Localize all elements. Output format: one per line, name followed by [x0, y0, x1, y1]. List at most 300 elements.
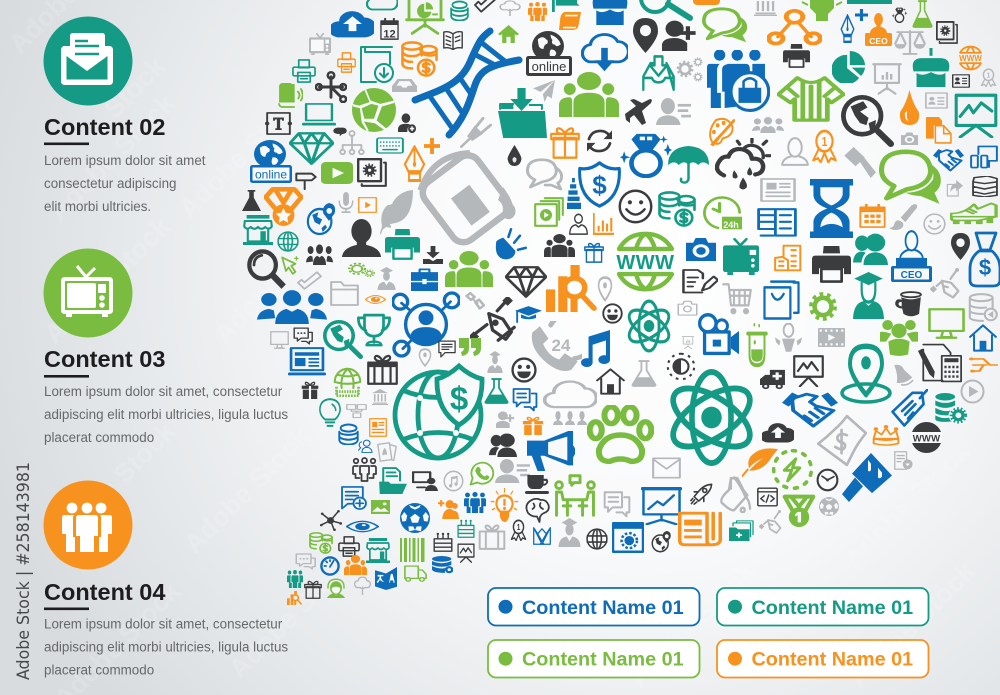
icon: quotes — [459, 338, 481, 356]
icon: gauge — [321, 557, 339, 575]
icon: gift outline — [305, 581, 321, 598]
icon: camera outline — [678, 301, 697, 315]
icon: diamond teal — [290, 133, 333, 164]
icon: mug — [895, 292, 921, 316]
icon: support agent — [327, 579, 345, 598]
icon: shield dollar — [580, 163, 619, 206]
icon: umbrella — [668, 146, 709, 183]
icon: people gray — [752, 117, 784, 133]
icon: people green small — [445, 251, 493, 287]
icon: large chat green — [882, 152, 941, 204]
icon: www orange — [959, 47, 982, 69]
icon: soccer gray — [819, 497, 839, 516]
icon: mini chart orange — [287, 591, 301, 605]
icon: www dark — [911, 422, 942, 453]
icon: gear green — [811, 294, 835, 319]
icon: coins — [402, 42, 437, 76]
icon: team — [44, 480, 132, 570]
icon: open book — [444, 32, 462, 50]
icon: pen plus — [841, 9, 868, 42]
icon: CEO orange: CEO — [869, 36, 888, 46]
icon: shopping bags — [764, 282, 799, 319]
icon: ambulance — [760, 370, 785, 389]
icon: team teal — [287, 570, 303, 588]
icon: gift orange solid — [523, 417, 543, 435]
icon: gift orange — [551, 128, 579, 158]
icon: atom small — [625, 301, 673, 351]
icon: inbox download — [643, 56, 674, 90]
icon: person note gray — [656, 98, 691, 125]
icon: handshake large — [782, 393, 838, 426]
icon: add people orange — [438, 500, 459, 519]
icon: diamond ring — [620, 134, 672, 176]
icon: monitor green — [929, 309, 964, 338]
icon: leaf — [742, 448, 778, 476]
icon: globe online — [526, 31, 572, 76]
icon: pages folder — [379, 468, 407, 494]
icon: presentation teal — [956, 95, 996, 137]
icon: bank — [372, 389, 388, 405]
icon: camera gray — [901, 133, 918, 145]
icon: medal green — [785, 497, 813, 527]
text block: Lorem ipsum dolor sit amet, consectetur — [44, 616, 283, 632]
watermark pattern: Adobe Stock — [43, 88, 182, 226]
icon: location pin large — [842, 346, 890, 402]
legend item: blue — [488, 588, 700, 626]
icon: cake top — [593, 0, 627, 25]
icon: mini chat — [333, 128, 347, 136]
icon: keyboard — [377, 138, 403, 153]
icon: newspaper gray — [761, 179, 795, 201]
icon: book with signal — [279, 83, 303, 107]
icon: medal orange — [266, 189, 301, 226]
icon: document pen — [683, 270, 718, 292]
icon: id card gray — [926, 93, 947, 108]
watermark pattern: Adobe Stock — [843, 556, 982, 694]
icon: printer dark — [339, 537, 359, 556]
legend item: green: Content Name 01 — [522, 648, 684, 670]
icon: signpost — [296, 174, 316, 189]
icon: diamond dark — [506, 267, 546, 297]
icon: shop teal — [243, 215, 273, 245]
icon: crown blue — [534, 528, 550, 544]
text block: placerat commodo — [44, 430, 154, 445]
icon: megaphone — [527, 431, 575, 471]
icon: group green — [880, 320, 918, 356]
icon: trophy — [358, 315, 390, 345]
icon: news book — [680, 513, 720, 545]
icon: pen tool — [468, 295, 514, 342]
icon: tv gray — [309, 34, 331, 55]
icon: agent gray — [775, 324, 802, 352]
icon: text T — [265, 113, 292, 134]
icon: newspaper orange — [370, 419, 386, 436]
icon: dots chat — [294, 328, 312, 344]
icon: database gray — [970, 294, 997, 321]
icon: code window — [758, 488, 777, 506]
icon: teal arc — [367, 0, 398, 10]
icon: eye blue — [347, 521, 378, 532]
icon: www dark: WWW — [913, 434, 940, 444]
icon: paper plane — [533, 80, 555, 102]
icon: price tag — [892, 389, 928, 425]
icon: chart board dark — [794, 356, 823, 386]
icon: idea alert — [491, 489, 518, 522]
icon: cake teal — [458, 520, 474, 537]
icon: team blue — [464, 492, 486, 513]
icon: browser gear — [612, 522, 644, 553]
icon: award dark — [511, 520, 526, 541]
icon: whatsapp — [471, 463, 493, 484]
icon: printer large — [812, 246, 851, 282]
icon: eye orange — [365, 295, 386, 304]
icon: scales — [895, 31, 925, 54]
icon: shopping cart — [723, 284, 751, 314]
icon: pie chart board — [407, 0, 443, 33]
icon: first place ribbon — [813, 131, 836, 162]
icon: id card dark — [953, 75, 969, 87]
icon: team dark — [306, 244, 333, 265]
icon: www globe — [616, 234, 675, 289]
icon: palette — [710, 119, 734, 146]
watermark pattern: Stock — [98, 50, 172, 124]
icon: note bubble — [439, 341, 455, 357]
icon: large atom — [665, 372, 758, 463]
icon: share — [947, 180, 963, 196]
icon: photo — [371, 500, 390, 514]
icon: check gray — [298, 272, 321, 289]
icon: paw — [590, 407, 651, 461]
icon: printer teal — [385, 229, 420, 259]
text block: Lorem ipsum dolor sit amet, consectetur — [44, 384, 283, 399]
icon: clock — [818, 470, 837, 490]
icon: home dark — [597, 369, 624, 394]
icon: graduation cap — [515, 306, 542, 322]
icon: chat bubbles gray — [527, 160, 562, 189]
icon: printer outline — [338, 53, 355, 72]
icon: clock 24h — [704, 198, 742, 230]
icon: book download — [361, 47, 393, 82]
icon: folder gray — [331, 282, 358, 305]
icon: pin gray — [599, 278, 611, 300]
speech bubble made of icons — [242, 0, 1000, 605]
watermark pattern: Adobe Stock — [838, 436, 977, 574]
source credit: Adobe Stock | #258143981 — [14, 462, 34, 680]
icon: bell — [894, 365, 913, 385]
icon: music circle — [444, 471, 463, 491]
legend item: teal: Content Name 01 — [752, 597, 913, 619]
icon: shoe — [951, 203, 996, 224]
icon: globe online: online — [532, 59, 566, 74]
icon: tv teal — [723, 239, 759, 275]
icon: globe dark — [587, 529, 607, 549]
icon: monitor person — [413, 472, 438, 491]
icon: stairs — [567, 178, 581, 209]
icon: striped shirt — [778, 78, 844, 120]
icon: network — [316, 72, 346, 102]
icon: bar chart orange — [593, 213, 614, 235]
icon: shop teal small — [366, 538, 390, 563]
icon: bulb — [320, 399, 340, 426]
icon: www orange: WWW — [959, 54, 982, 63]
icon: CEO blue: CEO — [901, 270, 923, 281]
icon: search globe teal — [323, 320, 361, 357]
icon: translate — [375, 567, 397, 590]
icon: globe garden — [335, 369, 360, 396]
watermark pattern: Adobe Stock — [173, 86, 312, 224]
icon: microphone — [339, 192, 353, 212]
icon: database gear — [935, 393, 966, 422]
text block: placerat commodo — [44, 662, 154, 678]
icon: film — [818, 328, 845, 347]
icon: soccer ball — [400, 503, 430, 533]
icon: ring small — [892, 8, 907, 22]
icon: briefcase — [411, 269, 438, 291]
icon: devices — [971, 146, 997, 168]
icon: chat dots gray — [296, 554, 315, 569]
icon: music note — [581, 330, 610, 367]
icon: calculator document — [918, 345, 961, 381]
icon: pie chart — [831, 51, 865, 84]
watermark pattern: Adobe Stock — [208, 211, 347, 349]
icon: monitor search — [271, 332, 288, 348]
icon: chain — [467, 293, 484, 309]
icon: flask dark — [242, 190, 261, 211]
icon: gear pages top — [937, 22, 957, 43]
panel: content 02 — [44, 16, 206, 214]
icon: money bag — [970, 233, 1000, 286]
icon: video play — [321, 162, 353, 184]
icon: lightbulb green — [802, 0, 842, 21]
icon: small board gray — [682, 337, 694, 348]
icon: home blue — [970, 325, 996, 351]
legend item: teal — [717, 588, 928, 626]
icon: cursor — [282, 256, 298, 274]
text block: elit morbi ultricies. — [44, 199, 151, 214]
icon: video camera — [700, 315, 739, 354]
icon: person silhouette — [342, 219, 381, 257]
icon: cloud gray — [545, 381, 596, 407]
icon: orange book — [559, 12, 581, 30]
icon: pin small gray — [419, 349, 431, 366]
icon: pen tool gray — [930, 268, 959, 297]
icon: database blue — [432, 556, 453, 573]
icon: upload cloud — [329, 11, 376, 37]
icon: check — [475, 0, 497, 12]
icon: gear pages — [358, 159, 386, 186]
icon: team orange — [528, 2, 547, 21]
icon: woman gray — [487, 351, 503, 373]
icon: magnifier teal — [641, 0, 690, 18]
icon: person note — [495, 459, 530, 483]
icon: map pin — [633, 18, 658, 53]
icon: green globe — [352, 88, 396, 132]
icon: businessman outline — [570, 214, 587, 234]
icon: flask teal — [485, 379, 508, 403]
icon: half sun — [668, 354, 694, 379]
icon: energy — [774, 451, 811, 488]
icon: gift blue — [585, 244, 603, 262]
icon: presentation gray — [873, 64, 901, 94]
icon: hourglass — [810, 179, 853, 238]
heading: Content 04 — [44, 579, 165, 605]
icon: bars search orange — [546, 265, 594, 312]
icon: coins teal — [660, 192, 694, 226]
icon: calendar 12 — [381, 18, 398, 40]
icon: crown orange — [874, 425, 898, 445]
icon: flag — [552, 0, 580, 12]
icon: document gray — [895, 452, 913, 469]
icon: globe shield large — [395, 366, 482, 458]
icon: shield dollar: $ — [592, 170, 607, 200]
icon: chart board — [458, 544, 474, 562]
icon: add user — [398, 113, 416, 133]
icon: globe outline teal — [278, 232, 298, 251]
icon: open envelope — [44, 16, 132, 106]
icon: people outline blue — [359, 440, 372, 452]
icon: nodes orange — [769, 10, 820, 44]
watermark pattern: Adobe Stock — [38, 211, 177, 349]
watermark pattern: Adobe Stock — [178, 421, 317, 559]
legend item: blue: Content Name 01 — [522, 597, 684, 619]
panel: content 04 — [44, 480, 288, 678]
icon: coins blue — [339, 425, 358, 445]
icon: pen gray small — [759, 510, 781, 533]
icon: tray — [392, 79, 417, 92]
icon: www globe: WWW — [616, 252, 675, 274]
icon: globe pin dark — [652, 531, 671, 552]
icon: flask green — [913, 1, 932, 27]
legend — [488, 588, 928, 678]
icon: documents orange — [926, 117, 952, 144]
icon: ink drop — [508, 145, 521, 166]
icon: graduate teal — [853, 272, 884, 319]
icon: people orange — [344, 555, 367, 575]
icon: person gray — [377, 267, 396, 290]
icon: smile large — [513, 359, 535, 381]
icon: plug — [461, 118, 491, 147]
panel: content 03 — [44, 248, 288, 445]
legend item: orange: Content Name 01 — [752, 648, 913, 670]
icon: gift box dark — [368, 356, 397, 384]
icon: globe pin — [308, 203, 335, 234]
icon: chat green — [704, 9, 747, 42]
icon: hub nodes — [320, 510, 342, 531]
icon: money bag: $ — [979, 255, 991, 280]
icon: org chart — [340, 131, 364, 154]
icon: globe online blue: online — [255, 168, 287, 182]
text block: adipiscing elit morbi ultricies, ligula luctus — [44, 640, 288, 654]
icon: people green — [559, 72, 619, 117]
icon: phone 24 — [532, 313, 596, 371]
text block: consectetur adipiscing — [44, 176, 176, 191]
icon: brain — [526, 499, 549, 522]
text block: Lorem ipsum dolor sit amet — [44, 153, 206, 168]
icon: CEO blue — [891, 231, 932, 282]
icon: weather cloud — [717, 138, 771, 189]
icon: flask gray — [632, 361, 656, 386]
icon: play pages — [535, 198, 563, 226]
icon: three people gray — [553, 411, 587, 425]
icon: cake large teal — [913, 48, 949, 87]
icon: crown dark — [434, 533, 452, 551]
icon: user outline — [782, 138, 808, 165]
icon: buildings orange — [775, 246, 800, 270]
icon: globe shield large: $ — [450, 380, 468, 417]
icon: team lock — [707, 49, 769, 111]
watermark pattern: Adobe Stock — [623, 556, 762, 694]
icon: play square — [359, 198, 376, 212]
icon: teal bar — [847, 0, 892, 4]
icon: large paint bucket — [412, 143, 516, 247]
icon: sync — [587, 130, 612, 152]
icon: barcode — [400, 538, 424, 562]
icon: smile gray — [924, 214, 945, 234]
icon: cards — [378, 443, 396, 461]
icon: smile outline — [620, 191, 651, 222]
icon: search dark — [249, 251, 284, 287]
icon: folder download — [498, 88, 547, 138]
text block: adipiscing elit morbi ultricies, ligula luctus — [44, 407, 288, 422]
heading: Content 02 — [44, 114, 165, 140]
icon: meeting — [556, 476, 594, 515]
icon: trees — [500, 1, 520, 16]
heading: Content 03 — [44, 346, 165, 372]
icon: play circle — [962, 380, 984, 402]
icon: feather — [380, 190, 413, 235]
icon: calendar 12: 12 — [383, 28, 396, 40]
icon: paint bucket small — [721, 477, 750, 512]
icon: clock 24h: 24h — [723, 220, 739, 230]
icon: gavel — [844, 147, 876, 178]
icon: graduate gray — [558, 518, 581, 547]
icon: CEO orange — [865, 13, 892, 46]
icon: two people teal — [853, 234, 888, 265]
icon: stack of books — [973, 176, 997, 197]
icon: printer top — [783, 44, 810, 67]
icon: drop orange — [900, 90, 919, 125]
icon: computer blue — [759, 209, 795, 236]
icon: chat plus — [342, 487, 366, 510]
icon: paint brush blue — [842, 453, 892, 502]
icon: cloud download — [582, 35, 628, 71]
icon: gears gray — [678, 58, 702, 81]
icon: books — [451, 1, 468, 21]
icon: gift small dark — [302, 382, 318, 399]
legend item: orange — [717, 640, 928, 678]
icon: folder teal — [729, 521, 753, 541]
icon: coffee — [525, 475, 549, 494]
watermark pattern: Adobe Stock — [223, 546, 362, 684]
icon: test tube — [747, 323, 767, 365]
icon: DNA helix — [415, 31, 519, 135]
icon: chat blue — [514, 389, 536, 410]
icon: laptop — [302, 104, 336, 126]
icon: network gray — [347, 405, 366, 418]
icon: gears green — [349, 263, 374, 277]
icon: presentation blue — [641, 487, 682, 524]
icon: globe online blue — [250, 140, 292, 183]
icon: people dark — [544, 234, 575, 257]
icon: phone 24: 24 — [552, 336, 571, 355]
icon: add contact — [662, 21, 696, 51]
icon: paint brush gray — [889, 204, 917, 230]
icon: globe search — [841, 95, 891, 144]
icon: laptop news — [288, 348, 326, 375]
icon: circuit — [969, 357, 997, 373]
icon: team outline — [353, 458, 376, 481]
icon: airplane — [625, 99, 652, 125]
